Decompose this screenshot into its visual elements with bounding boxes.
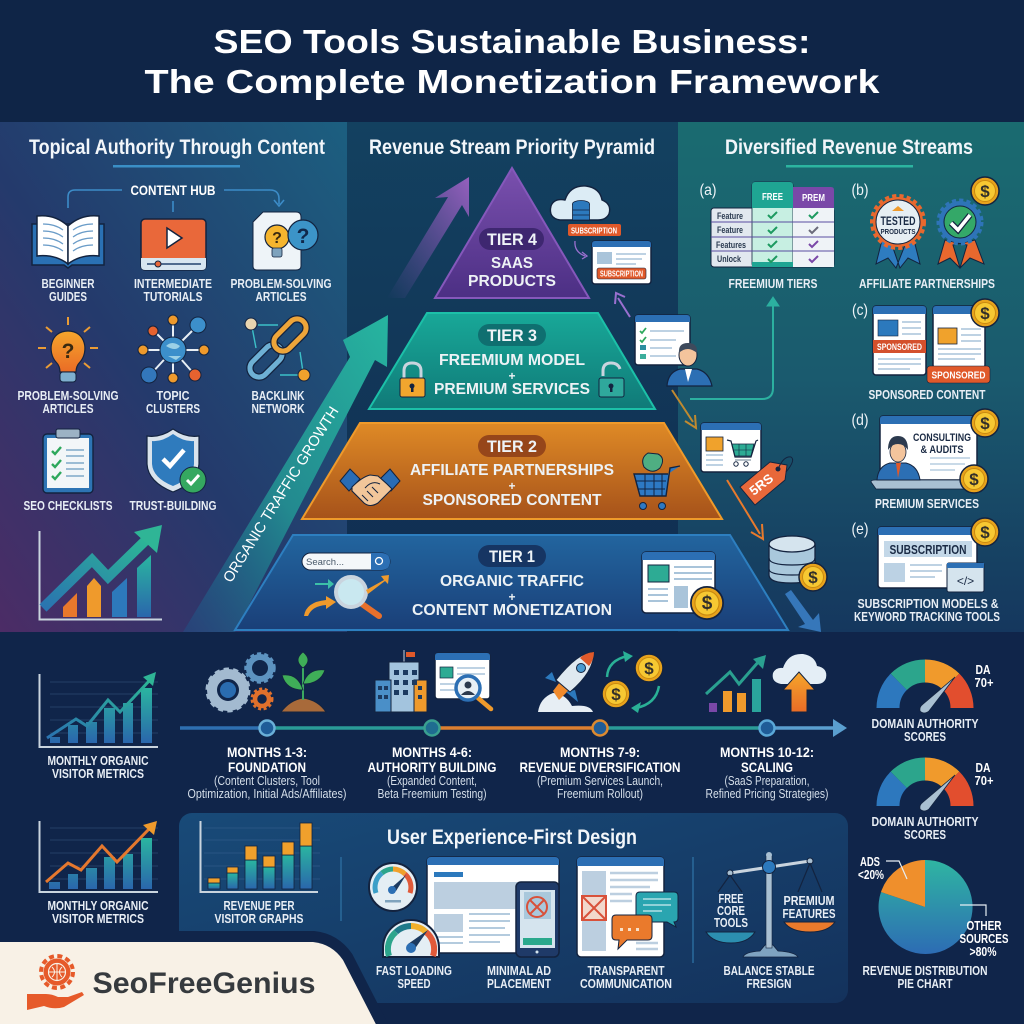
gauge: domain authority 2: DA (976, 760, 991, 775)
icon: document with question: ? (272, 230, 282, 247)
milestone: months 10-12: (SaaS Preparation, (724, 773, 810, 788)
tier 2: TIER 2 (487, 437, 537, 456)
heading: diversified revenue: Diversified Revenue Streams (725, 135, 973, 159)
icon: minimal ad placement phone: MINIMAL AD (487, 963, 551, 978)
stream c: sponsored content: (c) (852, 302, 868, 319)
gauge: domain authority 1: SCORES (904, 729, 946, 744)
stream a: freemium tiers: Feature (717, 225, 743, 236)
icon: topic clusters (138, 315, 209, 383)
stream d: premium services: $ (980, 414, 990, 433)
arrow: purple growth (387, 177, 469, 298)
gauge: domain authority 1: DA (976, 662, 991, 677)
gauge: domain authority 1: DOMAIN AUTHORITY (872, 716, 979, 731)
stream c: sponsored content (852, 299, 999, 402)
stream d: premium services: CONSULTING (913, 432, 971, 444)
title band: SEO Tools Sustainable Business: (214, 24, 810, 61)
milestone: months 10-12: Refined Pricing Strategies) (706, 786, 828, 801)
icon: fast loading speed: FAST LOADING (376, 963, 452, 978)
stream b: affiliate partnerships: (b) (852, 182, 868, 199)
chart: traffic growth (40, 525, 162, 620)
panel: revenue pyramid background (347, 122, 678, 632)
chart: monthly organic visitor metrics 1: VISITOR METRICS (52, 766, 144, 781)
icon: closed lock (400, 363, 425, 397)
icon: search box and magnifier: Search... (306, 557, 344, 568)
icon: balance scale: FEATURES (782, 906, 836, 921)
label: topic clusters (146, 388, 200, 416)
label: beginner guides (42, 276, 95, 304)
icon: idea bulb: ? (62, 340, 74, 363)
milestone: months 1-3: MONTHS 1-3: (227, 744, 307, 760)
icon: fast loading speed: SPEED (398, 976, 430, 991)
icon: gear on hand (27, 956, 84, 1010)
icon: checklist browser and consultant (635, 315, 712, 386)
tier 1: CONTENT MONETIZATION (412, 602, 612, 619)
stream b: affiliate partnerships: TESTED (880, 216, 916, 228)
label: problem-solving articles (230, 276, 332, 304)
milestone: months 4-6: (Expanded Content, (387, 773, 477, 788)
tier 4: PRODUCTS (468, 273, 556, 290)
content hub label and connectors: CONTENT HUB (130, 182, 216, 198)
icon: balance scale: PREMIUM (784, 893, 834, 908)
icon: transparent communication: TRANSPARENT (588, 963, 665, 978)
icon: database with coin: $ (808, 568, 818, 587)
stream c: sponsored content: SPONSORED (932, 370, 986, 382)
chart: monthly organic visitor metrics 2: MONTHLY ORGANIC (48, 898, 149, 913)
milestone: months 1-3: Optimization, Initial Ads/Affiliates) (188, 786, 346, 801)
label: topic clusters: CLUSTERS (146, 401, 200, 416)
tier 1 (235, 535, 788, 630)
tier 3: PREMIUM SERVICES (434, 381, 590, 398)
gauge: domain authority 2 (872, 760, 994, 842)
icon: balance scale: CORE (717, 903, 745, 918)
icon: transparent communication: COMMUNICATION (580, 976, 672, 991)
milestone: months 1-3 (188, 744, 346, 801)
milestone: months 1-3: (Content Clusters, Tool (214, 773, 320, 788)
gauge: domain authority 1 (872, 662, 994, 744)
chart: monthly organic visitor metrics 1: MONTHLY ORGANIC (48, 753, 149, 768)
stream a: freemium tiers: Features (716, 240, 746, 251)
icon: balance scale: BALANCE STABLE (724, 963, 815, 978)
icon: rocket and coins (538, 651, 663, 713)
label: backlink network: BACKLINK (252, 388, 305, 403)
icon: balance scale: TOOLS (714, 915, 748, 930)
stream d: premium services: (d) (852, 412, 868, 429)
label: intermediate tutorials (134, 276, 212, 304)
milestone: months 4-6: AUTHORITY BUILDING (368, 759, 497, 775)
icon: backlink chain (245, 315, 310, 381)
chart: revenue distribution pie: >80% (970, 944, 997, 959)
arrow: to tier 4 (615, 293, 630, 317)
label: problem-solving articles 2: ARTICLES (42, 401, 94, 416)
stream e: subscription models: SUBSCRIPTION (890, 543, 966, 557)
icon: minimal ad placement phone (487, 882, 559, 991)
icon: handshake (340, 469, 400, 506)
chart: revenue distribution pie: <20% (858, 867, 884, 882)
arrow: to cart browser (672, 390, 696, 428)
arrow: teal connector to freemium tiers (690, 297, 779, 399)
stream a: freemium tiers (700, 182, 834, 291)
chart: revenue distribution pie: ADS (860, 854, 880, 869)
chart: revenue per visitor (200, 821, 320, 926)
title band: The Complete Monetization Framework (144, 64, 880, 101)
icon: gears and plant (208, 652, 326, 712)
arrow: blue downward (785, 590, 821, 632)
gauge: domain authority 2: 70+ (974, 773, 994, 788)
milestone: months 4-6: Beta Freemium Testing) (378, 786, 486, 801)
label: backlink network (252, 388, 305, 416)
tier 1: + (508, 590, 516, 604)
milestone: months 7-9: Freemium Rollout) (557, 786, 643, 801)
stream b: affiliate partnerships: PRODUCTS (880, 227, 916, 236)
milestone: months 10-12 (706, 744, 828, 801)
icon: transparent communication (577, 857, 678, 991)
icons: tier 4 cloud and subscription window: SUBSCRIPTION (571, 226, 617, 236)
icon: fast loading speed (369, 857, 559, 991)
stream e: subscription models: </> (957, 574, 974, 588)
label: freemium tiers: FREEMIUM TIERS (728, 276, 818, 291)
label: problem-solving articles 2 (18, 388, 118, 416)
tier 2: + (508, 479, 516, 493)
icon: balance scale (706, 852, 836, 991)
stream c: sponsored content: SPONSORED (877, 342, 922, 352)
label: topic clusters: TOPIC (156, 388, 190, 403)
panel: diversified revenue background (678, 122, 1024, 632)
icon: cart browser and price tag: 5RS (746, 470, 776, 498)
milestone: months 10-12: MONTHS 10-12: (720, 744, 814, 760)
arrow: to database (727, 480, 763, 539)
tier 2: AFFILIATE PARTNERSHIPS (410, 462, 614, 479)
heading: topical authority: Topical Authority Through Content (29, 135, 325, 159)
stream b: affiliate partnerships (852, 177, 999, 291)
stream d: premium services: $ (969, 470, 979, 489)
label: backlink network: NETWORK (252, 401, 305, 416)
tier 2: SPONSORED CONTENT (422, 492, 602, 509)
tier 2 (302, 423, 722, 519)
icon: balance scale: FRESIGN (746, 976, 792, 991)
icon: clipboard checklist (43, 429, 93, 493)
stream b: affiliate partnerships: $ (980, 182, 990, 201)
label: premium services: PREMIUM SERVICES (875, 496, 979, 511)
label: problem-solving articles: ARTICLES (256, 289, 307, 304)
tier 3 (369, 313, 655, 409)
milestone: months 7-9 (520, 744, 680, 801)
label: trust-building: TRUST-BUILDING (130, 498, 216, 513)
content hub label and connectors (68, 182, 284, 212)
milestone: months 7-9: REVENUE DIVERSIFICATION (520, 759, 680, 775)
icon: browser with coin: $ (702, 593, 713, 614)
icon: browser with coin (642, 552, 723, 619)
heading: ux design: User Experience-First Design (387, 825, 637, 849)
chart: monthly organic visitor metrics 2 (40, 821, 158, 926)
logo badge (0, 942, 384, 1024)
stream a: freemium tiers: Unlock (717, 254, 742, 265)
chart: revenue distribution pie: SOURCES (960, 931, 1009, 946)
chart: revenue distribution pie (858, 854, 1009, 991)
label: seo checklists: SEO CHECKLISTS (24, 498, 113, 513)
label: problem-solving articles: PROBLEM-SOLVING (230, 276, 332, 291)
icon: buildings and magnifier (375, 650, 491, 712)
heading: priority pyramid: Revenue Stream Priority Pyramid (369, 135, 655, 159)
icon: balance scale: FREE (718, 891, 744, 906)
icon: trust shield (147, 429, 206, 493)
icon: rocket and coins: $ (644, 659, 654, 678)
milestone: months 4-6: MONTHS 4-6: (392, 744, 472, 760)
stream a: freemium tiers: Feature (717, 211, 743, 222)
tier 3: TIER 3 (487, 326, 537, 345)
arrow: organic traffic growth: ORGANIC TRAFFIC GROWTH (220, 404, 342, 586)
label: intermediate tutorials: TUTORIALS (144, 289, 203, 304)
stream e: subscription models (852, 518, 1000, 624)
gauge: domain authority 2: DOMAIN AUTHORITY (872, 814, 979, 829)
icon: document with question: ? (297, 225, 309, 248)
label: beginner guides: BEGINNER (42, 276, 95, 291)
icon: cart browser and price tag (701, 423, 793, 505)
tier 1: TIER 1 (489, 547, 535, 566)
icon: search box and magnifier (302, 553, 390, 616)
stream d: premium services (852, 409, 999, 511)
tier 4: TIER 4 (487, 230, 538, 249)
chart: revenue per visitor: VISITOR GRAPHS (214, 911, 304, 926)
label: beginner guides: GUIDES (49, 289, 87, 304)
icon: video tutorial (141, 219, 206, 270)
tier 1: ORGANIC TRAFFIC (440, 573, 584, 590)
milestone: months 4-6 (368, 744, 497, 801)
label: affiliate partnerships: AFFILIATE PARTNERSHIPS (859, 276, 995, 291)
tier 3: FREEMIUM MODEL (439, 352, 585, 369)
stream e: subscription models: (e) (852, 521, 868, 538)
milestone: months 10-12: SCALING (741, 759, 793, 775)
stream d: premium services: & AUDITS (920, 444, 964, 456)
icons: tier 4 cloud and subscription window: SUBSCRIPTION (600, 268, 643, 278)
stream a: freemium tiers: PREM (802, 192, 825, 204)
icon: minimal ad placement phone: PLACEMENT (487, 976, 551, 991)
icon: database with coin (769, 536, 827, 591)
icon: document with question (253, 212, 318, 270)
tier 4: SAAS (491, 255, 533, 272)
chart: revenue distribution pie: REVENUE DISTRIBUTION (862, 963, 988, 978)
stream e: subscription models: $ (980, 523, 990, 542)
chart: revenue distribution pie: OTHER (966, 918, 1002, 933)
gauge: domain authority 2: SCORES (904, 827, 946, 842)
tier 4 (435, 168, 589, 298)
chart: monthly organic visitor metrics 1 (40, 672, 158, 781)
title band (0, 0, 1024, 122)
milestone: months 7-9: (Premium Services Launch, (537, 773, 663, 788)
stream c: sponsored content: $ (980, 304, 990, 323)
tier 3: + (508, 369, 516, 383)
timeline (180, 719, 847, 737)
panel: topical authority (0, 122, 347, 632)
chart: revenue distribution pie: PIE CHART (898, 976, 953, 991)
icon: growth chart and cloud upload (706, 654, 826, 712)
stream a: freemium tiers: FREE (762, 191, 783, 203)
chart: revenue per visitor: REVENUE PER (224, 898, 295, 913)
logo badge: SeoFreeGenius (92, 967, 316, 1000)
icon: open book (32, 216, 104, 268)
label: problem-solving articles 2: PROBLEM-SOLVING (18, 388, 118, 403)
gauge: domain authority 1: 70+ (974, 675, 994, 690)
chart: monthly organic visitor metrics 2: VISITOR METRICS (52, 911, 144, 926)
label: subscription models: SUBSCRIPTION MODELS & (858, 596, 998, 611)
stream a: freemium tiers: (a) (700, 182, 716, 199)
icon: shopping cart (634, 453, 680, 510)
label: sponsored content: SPONSORED CONTENT (868, 387, 986, 402)
label: intermediate tutorials: INTERMEDIATE (134, 276, 212, 291)
arrow: organic traffic growth (183, 315, 388, 632)
milestone: months 7-9: MONTHS 7-9: (560, 744, 640, 760)
icon: open lock (599, 363, 624, 397)
icon: idea bulb (38, 317, 98, 382)
icons: tier 4 cloud and subscription window (550, 186, 651, 284)
milestone: months 1-3: FOUNDATION (228, 759, 306, 775)
icon: rocket and coins: $ (611, 685, 621, 704)
panel: user experience-first design (179, 813, 848, 1003)
